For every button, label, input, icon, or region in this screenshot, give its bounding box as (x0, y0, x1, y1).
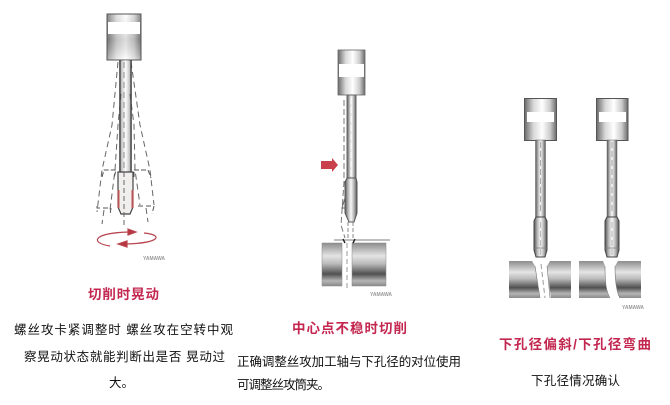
text block: swing during cutting: 螺丝攻卡紧调整时 螺丝攻在空转中观 (14, 322, 233, 337)
icon: tool right (596, 98, 628, 257)
icon: rotation arrows (97, 229, 156, 247)
diagram: swinging tap (97, 60, 154, 225)
diagram: bent pilot hole (579, 261, 641, 299)
panel: pilot hole misaligned or bent (509, 98, 644, 311)
heading: swing during cutting: 切削时晃动 (88, 286, 159, 302)
icon: tool holder left (107, 14, 141, 60)
icon: tool holder centre (338, 50, 365, 95)
panel: unstable center cutting (321, 50, 392, 298)
watermark: YAMAWA (143, 256, 165, 262)
text block: pilot hole: 下孔径情况确认 (531, 374, 620, 388)
icon: red arrow (321, 158, 338, 172)
text block: unstable center: 可调整丝攻筒夹。 (237, 377, 330, 392)
watermark: YAMAWA (622, 305, 644, 311)
text block: unstable center (237, 354, 461, 392)
text block: swing during cutting: 大。 (109, 376, 134, 390)
text block: swing during cutting (14, 322, 233, 390)
diagram: workpiece blocks (322, 239, 390, 288)
watermark: YAMAWA (370, 292, 392, 298)
icon: tool left (524, 98, 556, 257)
heading: unstable center: 中心点不稳时切削 (292, 320, 407, 336)
text block: swing during cutting: 察晃动状态就能判断出是否 晃动过 (24, 349, 225, 364)
diagram: inclined pilot hole (509, 261, 571, 299)
diagram: tap with offset center (341, 95, 357, 240)
text block: unstable center: 正确调整丝攻加工轴与下孔径的对位使用 (237, 354, 461, 369)
panel: swing during cutting (97, 14, 165, 262)
heading: pilot hole: 下孔径偏斜/下孔径弯曲 (499, 336, 651, 352)
